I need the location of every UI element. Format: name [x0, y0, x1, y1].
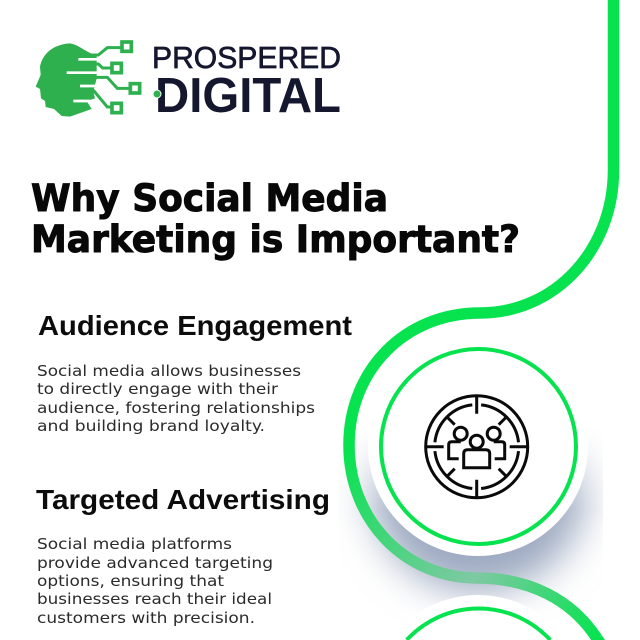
text block: targeted advertising description: provide advanced targeting [37, 554, 273, 572]
green ring [381, 349, 576, 544]
heading: Targeted Advertising: Targeted Advertising [36, 484, 330, 515]
text block: targeted advertising description: Social media platforms [37, 535, 232, 553]
text block: targeted advertising description: options, ensuring that [37, 572, 224, 590]
text block: audience engagement description: audience, fostering relationships [37, 399, 315, 417]
white disc [368, 336, 588, 556]
logo word: PROSPERED: PROSPERED [152, 40, 341, 75]
logo dot [153, 90, 161, 98]
logo word: DIGITAL: DIGITAL [155, 69, 341, 123]
title: Marketing is Important? [31, 218, 520, 261]
panel: next disc, partly cropped [389, 595, 567, 640]
text block: audience engagement description [37, 362, 315, 435]
panel: audience engagement disc [368, 336, 588, 556]
text block: audience engagement description: Social media allows businesses [37, 362, 301, 380]
text block: targeted advertising description: businesses reach their ideal [37, 590, 272, 608]
panel: targeted advertising text [36, 484, 330, 627]
icon: head with circuit traces [36, 42, 140, 117]
white disc [389, 595, 567, 640]
title: Why Social Media [31, 177, 388, 220]
text block: targeted advertising description: customers with precision. [37, 609, 255, 627]
text block: audience engagement description: and building brand loyalty. [37, 417, 265, 435]
icon: audience target [426, 396, 528, 498]
heading: Audience Engagement: Audience Engagement [38, 310, 352, 341]
disc shadow [346, 448, 603, 607]
panel: audience engagement text [37, 310, 352, 435]
logo: Prospered Digital [36, 40, 341, 123]
title [31, 177, 520, 261]
text block: audience engagement description: to directly engage with their [37, 380, 279, 398]
green ring [407, 608, 550, 640]
text block: targeted advertising description [37, 535, 273, 627]
winding green line [349, 0, 614, 640]
